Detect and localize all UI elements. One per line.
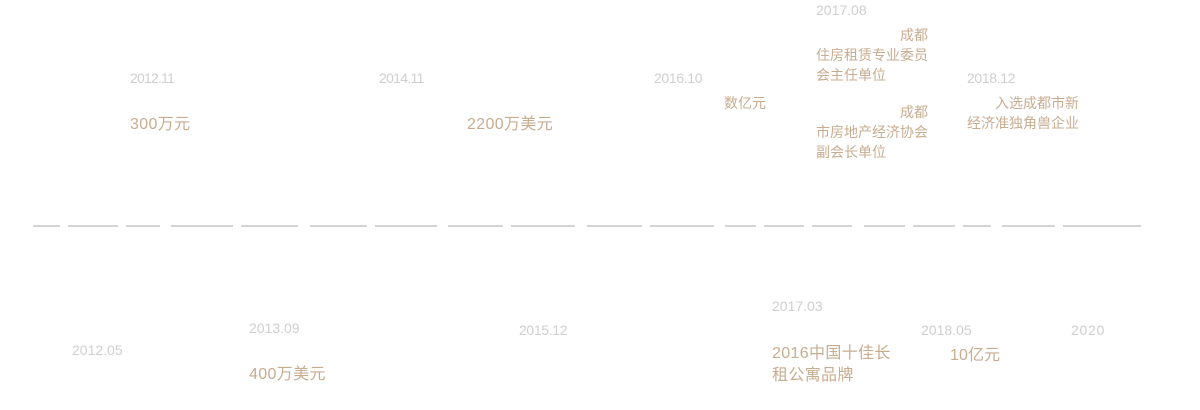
date: 2015.12: 2015.12 [519,322,567,338]
date: 2018.12: 2018.12 [967,70,1015,86]
award: 2016中国十佳长租公寓品牌 [772,344,891,384]
date: 2016.10: 2016.10 [654,70,702,86]
award: 住房租赁专业委员会: 成都 [900,27,928,43]
award: 入选成都市新经济准独角兽企业: 入选成都市新 [995,95,1079,111]
date: 2012.05: 2012.05 [72,342,123,358]
date: 2020: 2020 [1071,322,1105,338]
date: 2018.05: 2018.05 [921,322,972,338]
date: 2017.08: 2017.08 [816,2,867,18]
value: 400万美元: 400万美元 [249,366,326,383]
date: 2013.09: 2013.09 [249,320,300,336]
award: 房地产经济协会 [816,104,928,160]
award: 房地产经济协会: 成都 [900,104,928,120]
date: 2017.03: 2017.03 [772,298,823,314]
value: 300万元: 300万元 [130,116,190,133]
award: 2016中国十佳长租公寓品牌: 租公寓品牌 [772,367,854,384]
value: 2200万美元: 2200万美元 [467,116,553,133]
award: 房地产经济协会: 副会长单位 [816,144,886,160]
award: 入选成都市新经济准独角兽企业: 经济准独角兽企业 [967,115,1079,131]
award: 住房租赁专业委员会: 会主任单位 [816,67,886,83]
timeline dashed axis [33,225,1141,227]
date: 2014.11: 2014.11 [379,70,424,86]
value: 数亿元: 数亿元 [724,95,766,111]
award: 住房租赁专业委员会 [816,27,928,83]
award: 入选成都市新经济准独角兽企业 [967,95,1079,131]
date: 2012.11: 2012.11 [130,70,174,86]
award: 房地产经济协会: 市房地产经济协会 [816,124,928,140]
award: 住房租赁专业委员会: 住房租赁专业委员 [816,47,928,63]
value: 10亿元: 10亿元 [950,347,1000,364]
award: 2016中国十佳长租公寓品牌: 2016中国十佳长 [772,345,891,362]
